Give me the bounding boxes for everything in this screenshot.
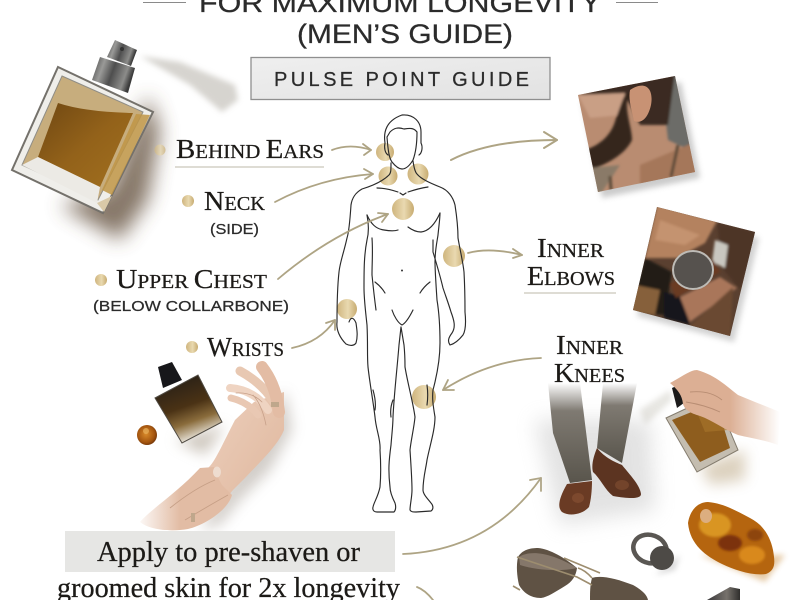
pulse point markers: [337, 143, 465, 409]
callout: grooming tip: Apply to pre-shaven or: [97, 537, 361, 568]
photo: trousers and shoes: [535, 383, 655, 525]
label: inner elbows: ELBOWS: [527, 261, 615, 291]
arrow: to legs: [403, 478, 541, 554]
label: inner knees: INNER: [556, 330, 623, 360]
label: inner elbows: INNER: [537, 233, 604, 263]
label: upper chest: (BELOW COLLARBONE): [93, 299, 289, 315]
label: inner knees: [554, 330, 625, 388]
label: wrists: WRISTS: [207, 332, 284, 362]
photo: hand spraying perfume: [640, 370, 780, 485]
arrow: to accessories: [417, 587, 433, 600]
photo: ear and beard: [570, 70, 700, 200]
label: neck: NECK: [204, 186, 265, 216]
label: neck: [182, 186, 265, 238]
photo: dark cap: [707, 587, 740, 600]
label: behind ears: BEHIND EARS: [176, 134, 324, 164]
arrow: upper chest: [278, 213, 388, 279]
arrow: to face photo: [451, 132, 557, 160]
arrow: behind ears: [332, 144, 371, 155]
photo: hands at the wrist: [140, 367, 292, 530]
label: inner knees: KNEES: [554, 358, 625, 388]
label: upper chest: UPPER CHEST: [116, 264, 267, 294]
label: inner elbows: [524, 233, 616, 293]
arrow: inner elbows: [468, 249, 522, 258]
heading: pulse point guide: PULSE POINT GUIDE: [274, 69, 529, 91]
photo: watch on wrist: [625, 200, 760, 342]
label: upper chest: [93, 264, 289, 315]
heading: pulse point guide: [251, 58, 550, 100]
arrow: inner knees: [443, 358, 541, 390]
label: neck: (SIDE): [210, 222, 259, 238]
icon: perfume bottle with spray: [12, 40, 238, 240]
title: (MEN’S GUIDE): [297, 19, 513, 49]
photo: dark perfume bottle and amber bead: [137, 362, 225, 455]
arrow: wrists: [292, 320, 335, 348]
callout: grooming tip: [57, 531, 400, 600]
arrow: neck: [275, 169, 373, 202]
body outline figure: [337, 115, 466, 512]
photo: amber stone: [688, 502, 785, 582]
title: [143, 0, 658, 49]
photo: signet ring: [629, 530, 680, 575]
photo: aviator sunglasses: [513, 548, 648, 600]
